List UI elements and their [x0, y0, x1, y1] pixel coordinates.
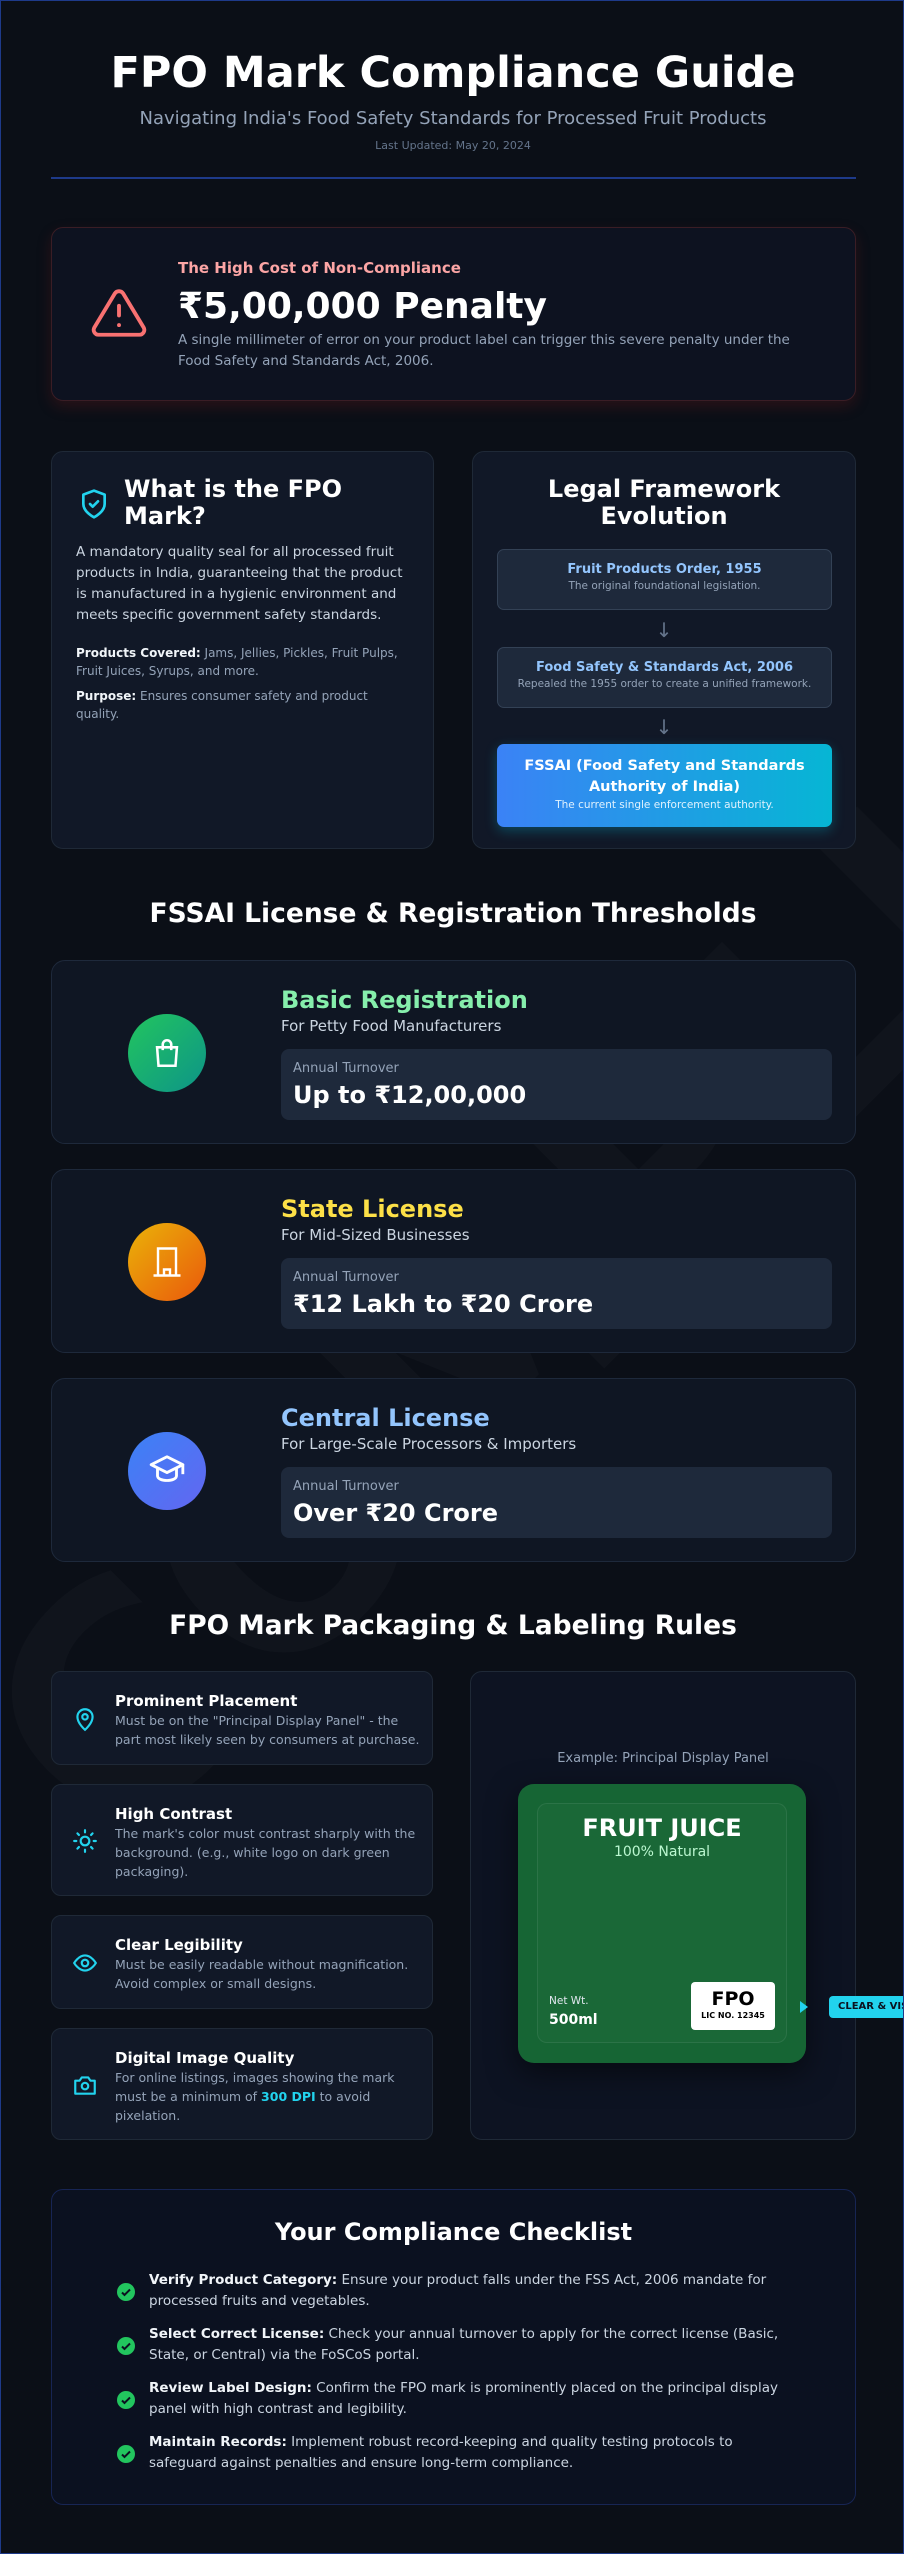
rule: prominent placement: Prominent Placement	[115, 1692, 297, 1710]
step: 1955: The original foundational legislation.	[568, 580, 760, 592]
icon: eye	[73, 1954, 97, 1972]
icon: camera	[74, 2076, 96, 2095]
purpose: Purpose: Ensures consumer safety and product	[76, 689, 368, 703]
panel: central license	[51, 1378, 856, 1562]
checklist items: Select Correct License: Check your annual turnover to apply for the correct license (Basic, State, or Central) via the FoSCoS portal.	[149, 2326, 778, 2363]
rule: high contrast: High Contrast	[115, 1805, 232, 1823]
icon: building	[128, 1223, 206, 1301]
rule: legibility: Clear Legibility	[115, 1936, 243, 1954]
turnover box: Annual Turnover	[293, 1270, 399, 1285]
icon: cap	[128, 1432, 206, 1510]
description: A mandatory quality seal for all processed fruit products in India, guaranteeing that the product is manufactured in a hygienic environment and meets specific government safety standards.	[76, 544, 402, 623]
icon: bag	[128, 1014, 206, 1092]
package mockup: 100% Natural	[614, 1844, 710, 1860]
checklist items: Verify Product Category: Ensure your product falls under the FSS Act, 2006 mandate for processed fruits and vegetables.	[149, 2272, 766, 2309]
rule: prominent placement: Must be on the "Principal Display Panel" - the part most likely seen by consumers at purchase.	[115, 1713, 419, 1747]
step: FSSAI: The current single enforcement authority.	[555, 799, 774, 811]
panel: penalty	[51, 227, 856, 401]
penalty description: A single millimeter of error on your product label can trigger this severe penalty under the Food Safety and Standards Act, 2006.	[178, 332, 790, 369]
arrow: ↓	[656, 715, 672, 739]
heading: packaging rules: FPO Mark Packaging & Labeling Rules	[169, 1610, 737, 1641]
icon: sun	[73, 1829, 97, 1853]
step: 2006: Repealed the 1955 order to create a unified framework.	[518, 678, 811, 690]
turnover box	[281, 1049, 832, 1120]
checklist items	[117, 2272, 778, 2471]
rule: digital quality	[51, 2028, 433, 2140]
panel: state license: State License	[281, 1195, 464, 1223]
step: FSSAI: FSSAI (Food Safety and Standards	[524, 758, 805, 774]
products covered: Products Covered: Jams, Jellies, Pickles, Fruit Pulps, Fruit Juices, Syrups, and more.	[76, 646, 398, 678]
purpose: quality.	[76, 707, 119, 721]
step: 2006: Food Safety & Standards Act, 2006	[536, 660, 793, 675]
rule: digital quality: Digital Image Quality	[115, 2049, 294, 2067]
rule: high contrast: The mark's color must contrast sharply with the background. (e.g., white logo on dark green packaging).	[115, 1826, 415, 1879]
icon: pin	[76, 1708, 94, 1732]
turnover box	[281, 1258, 832, 1329]
turnover box: Annual Turnover	[293, 1479, 399, 1494]
panel: central license: For Large-Scale Processors & Importers	[281, 1435, 576, 1453]
panel: what is FPO	[51, 451, 434, 849]
panel: state license: For Mid-Sized Businesses	[281, 1226, 470, 1244]
rule: digital quality: For online listings, images showing the mark must be a minimum of 300 DPI to avoid pixelation.	[115, 2070, 394, 2123]
panel: state license	[51, 1169, 856, 1353]
panel: package example	[470, 1671, 856, 2140]
panel: basic registration	[51, 960, 856, 1144]
rule: legibility: Must be easily readable without magnification. Avoid complex or small designs.	[115, 1957, 408, 1991]
FPO mark: FPO	[711, 1988, 755, 2010]
panel: legal framework	[472, 451, 856, 849]
example label: Example: Principal Display Panel	[557, 1751, 769, 1766]
penalty amount: ₹5,00,000 Penalty	[178, 286, 547, 327]
rule: high contrast	[51, 1784, 433, 1896]
callout: clear & visible	[800, 1996, 904, 2018]
turnover box	[281, 1467, 832, 1538]
step: 1955: Fruit Products Order, 1955	[567, 562, 762, 577]
step: 2006	[497, 647, 832, 708]
arrow: ↓	[656, 618, 672, 642]
package mockup	[518, 1784, 806, 2063]
panel: central license: Central License	[281, 1404, 490, 1432]
package mockup: 500ml	[549, 2012, 598, 2028]
last updated: Last Updated: May 20, 2024	[375, 139, 531, 152]
heading: Evolution	[600, 502, 728, 530]
net weight: Net Wt.	[549, 1995, 589, 2007]
turnover box: Annual Turnover	[293, 1061, 399, 1076]
penalty label: The High Cost of Non-Compliance	[178, 259, 461, 277]
FPO mark: LIC NO. 12345	[701, 2011, 765, 2020]
step: FSSAI	[497, 744, 832, 827]
step: 1955	[497, 549, 832, 610]
rule: prominent placement	[51, 1671, 433, 1765]
checklist items: Maintain Records: Implement robust record-keeping and quality testing protocols to safeguard against penalties and ensure long-term compliance.	[149, 2434, 733, 2471]
icon: warning triangle	[92, 289, 146, 337]
product name: FRUIT JUICE	[582, 1814, 742, 1842]
panel: basic registration: For Petty Food Manufacturers	[281, 1017, 501, 1035]
checklist items: Review Label Design: Confirm the FPO mark is prominently placed on the principal display panel with high contrast and legibility.	[149, 2380, 778, 2417]
purpose	[76, 689, 368, 721]
checklist title: Your Compliance Checklist	[275, 2218, 632, 2246]
heading: thresholds: FSSAI License & Registration Thresholds	[149, 898, 757, 929]
FPO mark	[691, 1982, 775, 2030]
rule: legibility	[51, 1915, 433, 2009]
turnover box: Over ₹20 Crore	[293, 1499, 498, 1527]
panel: checklist	[51, 2189, 856, 2505]
step: FSSAI: Authority of India)	[589, 779, 740, 795]
heading: What is the FPO Mark?	[124, 475, 342, 530]
heading: Legal Framework	[548, 475, 780, 503]
icon: shield	[82, 489, 106, 519]
panel: basic registration: Basic Registration	[281, 986, 528, 1014]
title: FPO Mark Compliance Guide	[110, 48, 796, 98]
subtitle: Navigating India's Food Safety Standards for Processed Fruit Products	[140, 108, 766, 129]
turnover box: Up to ₹12,00,000	[293, 1081, 526, 1109]
turnover box: ₹12 Lakh to ₹20 Crore	[293, 1290, 593, 1318]
heading	[548, 475, 780, 530]
